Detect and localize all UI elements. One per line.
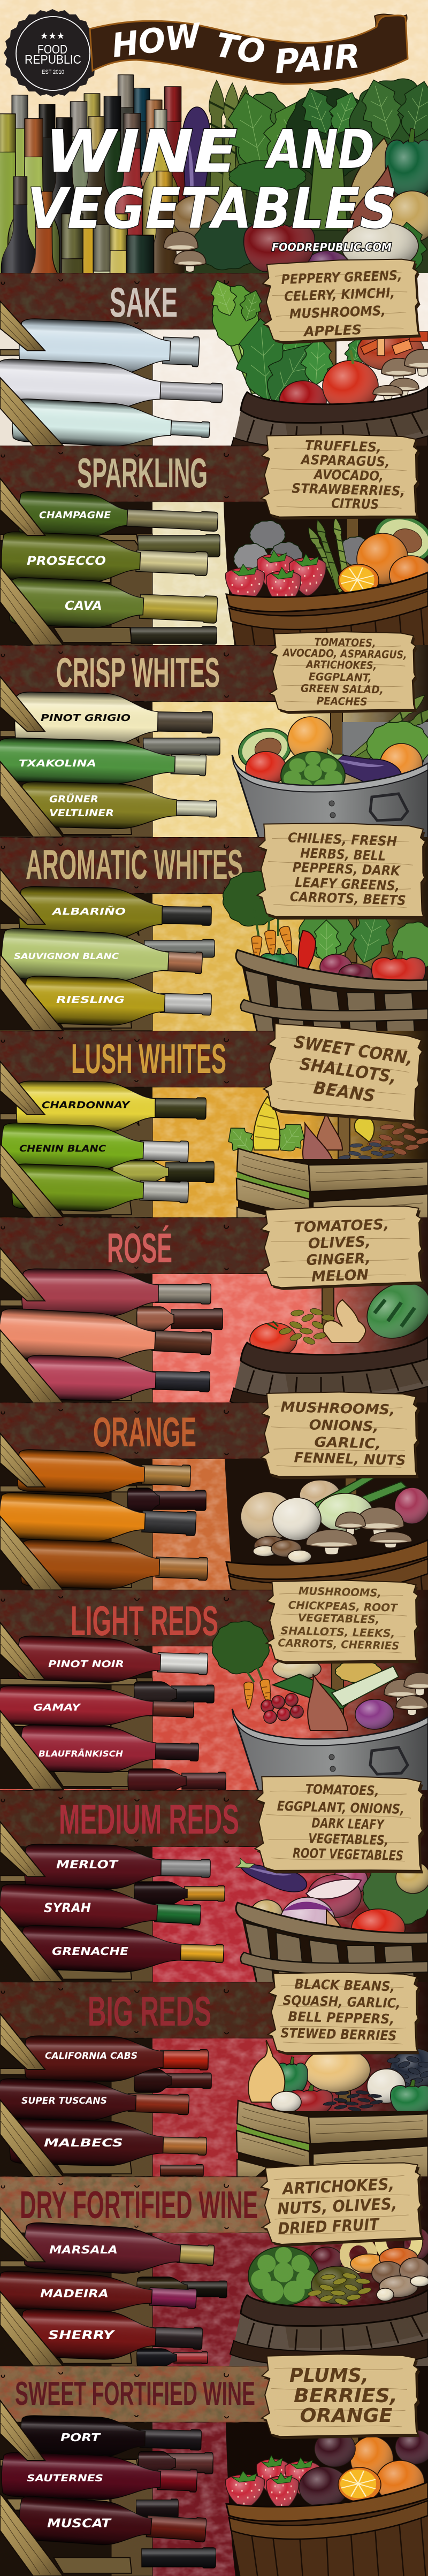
logo badge: ★★★ (41, 32, 65, 41)
plank: Sparkling title (0, 446, 291, 502)
sign: Light Reds pairings: MUSHROOMS, (299, 1584, 381, 1599)
sign: Sparkling pairings: ASPARAGUS, (300, 452, 390, 470)
bottle: gruner veltliner: GRÜNER (49, 793, 98, 805)
bottle: marsala (23, 2222, 215, 2279)
produce: corn, shallots, beans in crate (221, 1097, 428, 1229)
plank: Sparkling title: SPARKLING (77, 449, 208, 496)
sign: Sweet Fortified Wine pairings (262, 2353, 420, 2440)
bottle: gamay (0, 1685, 194, 1729)
bottle: background bottom black (142, 2548, 216, 2568)
bottle: prosecco (1, 531, 209, 588)
plank: Light Reds title: LIGHT REDS (71, 1597, 218, 1644)
bottle: background dark (134, 1682, 214, 1706)
title: wine and vegetables (27, 117, 397, 241)
sign: Sake pairings: CELERY, KIMCHI, (284, 285, 395, 304)
sign: Crisp Whites pairings: GREEN SALAD, (301, 682, 384, 696)
header panel (0, 0, 428, 617)
bottle: chardonnay (16, 1081, 206, 1134)
sign: Dry Fortified Wine pairings (261, 2161, 424, 2247)
plank: Rosé title (0, 1217, 291, 1274)
sign: Medium Reds pairings (254, 1774, 426, 1877)
sign: Rosé pairings (261, 1205, 424, 1290)
bottle: merlot: MERLOT (56, 1858, 119, 1871)
bottle: dark background (131, 626, 217, 645)
plank: Crisp Whites title (0, 645, 291, 702)
sign: Rosé pairings: GINGER, (306, 1250, 371, 1269)
bottle: super tuscans (0, 2078, 189, 2125)
section: Sparkling (0, 433, 428, 685)
bottle: background red cap (137, 2349, 208, 2367)
sign: Aromatic Whites pairings: CHILIES, FRESH (288, 830, 398, 849)
bottle: pinot noir (17, 1636, 208, 1686)
sign: Crisp Whites pairings: PEACHES (316, 694, 368, 708)
plank: Big Reds title (0, 1982, 291, 2038)
sign: Sparkling pairings: STRAWBERRIES, (292, 480, 406, 499)
plank: Sweet Fortified Wine title: SWEET FORTIFIED WINE (15, 2375, 255, 2412)
produce: squash, beans, garlic, peppers in crate (236, 2041, 428, 2181)
rack braces: Sake (0, 301, 63, 446)
produce: carrots, parsnip, chickpeas, leek, cherries, shallot, turnip, mushrooms in tub (212, 1621, 428, 1803)
plank: Medium Reds title: MEDIUM REDS (59, 1796, 239, 1843)
bottle: madeira: MADEIRA (40, 2287, 109, 2300)
ribbon banner: TO (212, 25, 268, 72)
plank: Sake title: SAKE (110, 279, 178, 326)
title: wine and vegetables: AND (264, 118, 374, 181)
sign: Rosé pairings: TOMATOES, (294, 1216, 389, 1236)
bottle: cava: CAVA (65, 599, 102, 613)
section: Light Reds (0, 1579, 428, 1803)
bottle: syrah (0, 1883, 202, 1936)
bottle: pinot grigio: PINOT GRIGIO (41, 712, 131, 724)
sign: Lush Whites pairings (261, 1021, 426, 1127)
bottle: background lower (160, 2165, 203, 2176)
sign: Orange pairings: FENNEL, NUTS (294, 1450, 406, 1469)
bottle: gruner veltliner: VELTLINER (49, 808, 114, 819)
sign: Sake pairings (262, 258, 421, 344)
rack braces: Dry Fortified Wine (0, 2207, 63, 2366)
ribbon banner: PAIR (273, 36, 362, 81)
section: Aromatic Whites (0, 821, 428, 1034)
plank: Orange title (0, 1402, 291, 1459)
sign: Big Reds pairings: BLACK BEANS, (294, 1976, 395, 1995)
produce: onions, garlic, fennel, mushrooms, nuts in half barrel (226, 1465, 428, 1653)
bottle: txakolina (0, 738, 207, 787)
bottle: marsala: MARSALA (49, 2243, 118, 2256)
sign: Crisp Whites pairings: AVOCADO, ASPARAGUS, (282, 646, 407, 661)
plank: Crisp Whites title: CRISP WHITES (56, 649, 220, 696)
ribbon banner (90, 14, 408, 84)
bottle: albarino (19, 886, 212, 942)
sign: Sparkling pairings (261, 433, 420, 522)
header vegetables (164, 74, 428, 279)
sign: Dry Fortified Wine pairings: DRIED FRUIT (278, 2215, 380, 2238)
plank: Lush Whites title: LUSH WHITES (71, 1035, 226, 1082)
sign: Aromatic Whites pairings: CARROTS, BEETS (289, 889, 406, 908)
section: Crisp Whites (0, 631, 428, 849)
produce: celery, greens, apples, kimchi, mushrooms in barrel (205, 276, 428, 483)
sign: Sparkling pairings: TRUFFLES, (305, 438, 381, 455)
rack braces: Crisp Whites (0, 677, 63, 837)
bottle: background upper black (136, 2499, 178, 2518)
bottle: pinot noir: PINOT NOIR (48, 1659, 124, 1670)
rack braces: Medium Reds (0, 1822, 63, 1982)
bottle: muscat (18, 2495, 207, 2552)
sign: Aromatic Whites pairings: LEAFY GREENS, (295, 875, 400, 894)
website url: FOODREPUBLIC.COM (272, 241, 392, 254)
bottle: txakolina: TXAKOLINA (19, 758, 96, 769)
sign: Crisp Whites pairings: EGGPLANT, (309, 670, 372, 684)
sign: Sake pairings: MUSHROOMS, (289, 303, 386, 321)
sign: Orange pairings: MUSHROOMS, (280, 1399, 395, 1419)
produce: truffles, asparagus, strawberries, avocado, oranges (226, 509, 428, 685)
produce: artichoke, olives, nuts, dried fruit in barrel (225, 2217, 428, 2386)
bottle: sake 3 (11, 398, 211, 451)
bottle: chenin blanc (1, 1123, 189, 1175)
plank: Dry Fortified Wine title (0, 2176, 291, 2233)
bottle: riesling: RIESLING (56, 994, 125, 1006)
bottle: sauvignon blanc (1, 927, 203, 988)
plank: Big Reds title: BIG REDS (88, 1988, 211, 2035)
bottle: background dark (128, 1488, 206, 1513)
produce: eggplant, parsnip, turnip, onion, kale, tomato in basket (233, 1858, 428, 1987)
bottle: riesling (24, 976, 212, 1028)
sign: Sweet Fortified Wine pairings: BERRIES, (294, 2385, 398, 2407)
sign: Light Reds pairings: CHICKPEAS, ROOT (288, 1599, 398, 1614)
bottle: background dark red (134, 2069, 211, 2092)
section: Big Reds (0, 1971, 428, 2181)
bottle: champagne: CHAMPAGNE (39, 510, 111, 521)
header bottles row (0, 75, 196, 617)
bottle: background brown (139, 2451, 213, 2475)
sign: Medium Reds pairings: DARK LEAFY (311, 1815, 385, 1833)
sign: Light Reds pairings: CARROTS, CHERRIES (278, 1636, 400, 1652)
section: Lush Whites (0, 1021, 428, 1229)
sign: Big Reds pairings (268, 1971, 421, 2057)
sign: Medium Reds pairings: VEGETABLES, (308, 1830, 389, 1848)
bottle: sauternes: SAUTERNES (27, 2473, 103, 2484)
sign: Sake pairings: APPLES (303, 322, 362, 340)
bottle: sauvignon blanc: SAUVIGNON BLANC (14, 951, 119, 961)
produce: carrots, peppers, greens, beets in basket (223, 871, 428, 1034)
bottle: orange 3 (20, 1539, 208, 1592)
bottle: albarino: ALBARIÑO (51, 905, 126, 917)
section: Medium Reds (0, 1774, 428, 1987)
sign: Dry Fortified Wine pairings: NUTS, OLIVES, (277, 2195, 398, 2219)
bottle: cava (9, 577, 218, 633)
bottle: syrah: SYRAH (44, 1900, 91, 1915)
plank: Dry Fortified Wine title: DRY FORTIFIED WINE (20, 2184, 258, 2227)
sign: Aromatic Whites pairings: PEPPERS, DARK (292, 860, 401, 879)
bottle: merlot (24, 1844, 211, 1890)
bottle: chardonnay: CHARDONNAY (42, 1100, 131, 1111)
bottle: blaufrankisch (20, 1724, 199, 1775)
bottle: port: PORT (60, 2431, 101, 2444)
ribbon banner: HOW (110, 16, 204, 65)
bottle: california cabs: CALIFORNIA CABS (45, 2051, 137, 2061)
logo badge: FOOD (37, 42, 67, 56)
bottle: orange 2 (0, 1492, 197, 1547)
bottle: malbecs: MALBECS (44, 2136, 123, 2149)
bottle: madeira (0, 2271, 197, 2318)
bottle: grenache (20, 1925, 224, 1976)
bottle: sherry (20, 2308, 203, 2363)
section: Dry Fortified Wine (0, 2161, 428, 2386)
title: wine and vegetables: WINE (45, 117, 238, 186)
bottle: california cabs (24, 2036, 208, 2082)
sign: Light Reds pairings: VEGETABLES, (297, 1611, 380, 1626)
bottle: prosecco: PROSECCO (27, 555, 106, 568)
bottle: background dark with gold cap (134, 1882, 225, 1905)
sign: Sparkling pairings: AVOCADO, (313, 466, 384, 484)
sign: Big Reds pairings: BELL PEPPERS, (288, 2008, 395, 2027)
section: Sweet Fortified Wine (0, 2353, 428, 2576)
sign: Big Reds pairings: SQUASH, GARLIC, (282, 1992, 401, 2011)
bottle: super tuscans: SUPER TUSCANS (21, 2096, 107, 2106)
bottle: background dark (137, 2277, 227, 2302)
bottle: sake 1 (18, 318, 200, 379)
logo badge: REPUBLIC (25, 52, 81, 66)
bottle: background grey (144, 939, 215, 957)
produce: avocado, peach, tomato, artichoke, eggplant, lettuce, asparagus in tub (232, 692, 428, 849)
bottle: background wine (128, 1769, 226, 1793)
bottle: background grey (143, 737, 220, 755)
bottle: chenin blanc: CHENIN BLANC (19, 1144, 106, 1154)
bottle: sherry: SHERRY (48, 2329, 116, 2342)
plank: Rosé title: ROSÉ (107, 1224, 172, 1271)
sign: Lush Whites pairings: BEANS (312, 1077, 377, 1106)
plank: Aromatic Whites title: AROMATIC WHITES (26, 841, 243, 888)
sign: Sparkling pairings: CITRUS (331, 495, 379, 512)
bottle: unlabelled white (11, 1163, 189, 1215)
plank: Sake title (0, 273, 291, 329)
bottle: sauternes (1, 2452, 197, 2503)
bottle: grenache: GRENACHE (52, 1945, 128, 1958)
title: wine and vegetables: VEGETABLES (27, 176, 397, 241)
section: Rosé (0, 1205, 428, 1433)
section: Orange (0, 1391, 428, 1653)
bottle: pinot grigio (14, 692, 213, 750)
sign: Crisp Whites pairings: ARTICHOKES, (305, 658, 377, 672)
bottle: champagne (18, 491, 219, 544)
bottle: port (20, 2416, 202, 2460)
logo badge (4, 9, 101, 97)
sign: Rosé pairings: OLIVES, (308, 1233, 371, 1252)
bottle: muscat: MUSCAT (47, 2517, 112, 2531)
bottle: background brown (137, 1307, 223, 1331)
sign: Crisp Whites pairings: TOMATOES, (314, 635, 376, 649)
sign: Big Reds pairings: STEWED BERRIES (280, 2025, 397, 2044)
produce: strawberries, plums, oranges in half barrel (226, 2430, 428, 2576)
bottle: gamay: GAMAY (33, 1702, 81, 1713)
bottle: orange 1 (17, 1449, 191, 1497)
bottle: rose 3 (25, 1355, 210, 1404)
rack braces: Sparkling (0, 478, 63, 645)
sign: Light Reds pairings: SHALLOTS, LEEKS, (280, 1624, 395, 1640)
sign: Orange pairings (261, 1391, 420, 1482)
sign: Lush Whites pairings: SHALLOTS, (299, 1054, 398, 1087)
sign: Medium Reds pairings: EGGPLANT, ONIONS, (277, 1798, 404, 1817)
sign: Orange pairings: GARLIC, (314, 1435, 381, 1452)
sign: Sweet Fortified Wine pairings: ORANGE (300, 2405, 393, 2427)
sign: Dry Fortified Wine pairings: ARTICHOKES, (281, 2175, 395, 2198)
rack braces: Light Reds (0, 1622, 63, 1789)
logo badge: EST 2010 (42, 69, 64, 75)
rack braces: Rosé (0, 1248, 63, 1403)
sign: Rosé pairings: MELON (311, 1267, 369, 1285)
rack braces: Lush Whites (0, 1061, 63, 1217)
sign: Aromatic Whites pairings: HERBS, BELL (300, 845, 386, 864)
section: Sake (0, 258, 428, 483)
bottle: gruner veltliner (20, 781, 217, 831)
rack braces: Sweet Fortified Wine (0, 2400, 63, 2576)
plank: Medium Reds title (0, 1790, 291, 1847)
bottle: rose 1 (21, 1269, 211, 1317)
sign: Orange pairings: ONIONS, (309, 1417, 379, 1435)
rack braces: Orange (0, 1433, 63, 1590)
sign: Crisp Whites pairings (270, 631, 417, 715)
plank: Lush Whites title (0, 1031, 291, 1087)
plank: Light Reds title (0, 1590, 291, 1646)
plank: Aromatic Whites title (0, 837, 291, 894)
sign: Medium Reds pairings: TOMATOES, (305, 1781, 379, 1799)
rack braces: Aromatic Whites (0, 869, 63, 1031)
bottle: background olive (138, 534, 220, 557)
bottle: rose 2 (0, 1308, 212, 1368)
sign: Light Reds pairings (266, 1579, 420, 1667)
sign: Sweet Fortified Wine pairings: PLUMS, (289, 2365, 369, 2387)
rack braces: Big Reds (0, 2014, 63, 2176)
bottle: sake 2 (0, 358, 224, 418)
produce: tomato, olives, ginger, melon in barrel (225, 1271, 428, 1433)
bottle: background (113, 1160, 214, 1184)
plank: Sweet Fortified Wine title (0, 2366, 291, 2422)
sign: Sake pairings: PEPPERY GREENS, (281, 267, 402, 287)
bottle: malbecs (9, 2118, 207, 2169)
sign: Lush Whites pairings: SWEET CORN, (293, 1032, 414, 1069)
sign: Aromatic Whites pairings (256, 821, 428, 924)
plank: Orange title: ORANGE (93, 1408, 196, 1455)
bottle: blaufrankisch: BLAUFRÄNKISCH (39, 1749, 124, 1759)
